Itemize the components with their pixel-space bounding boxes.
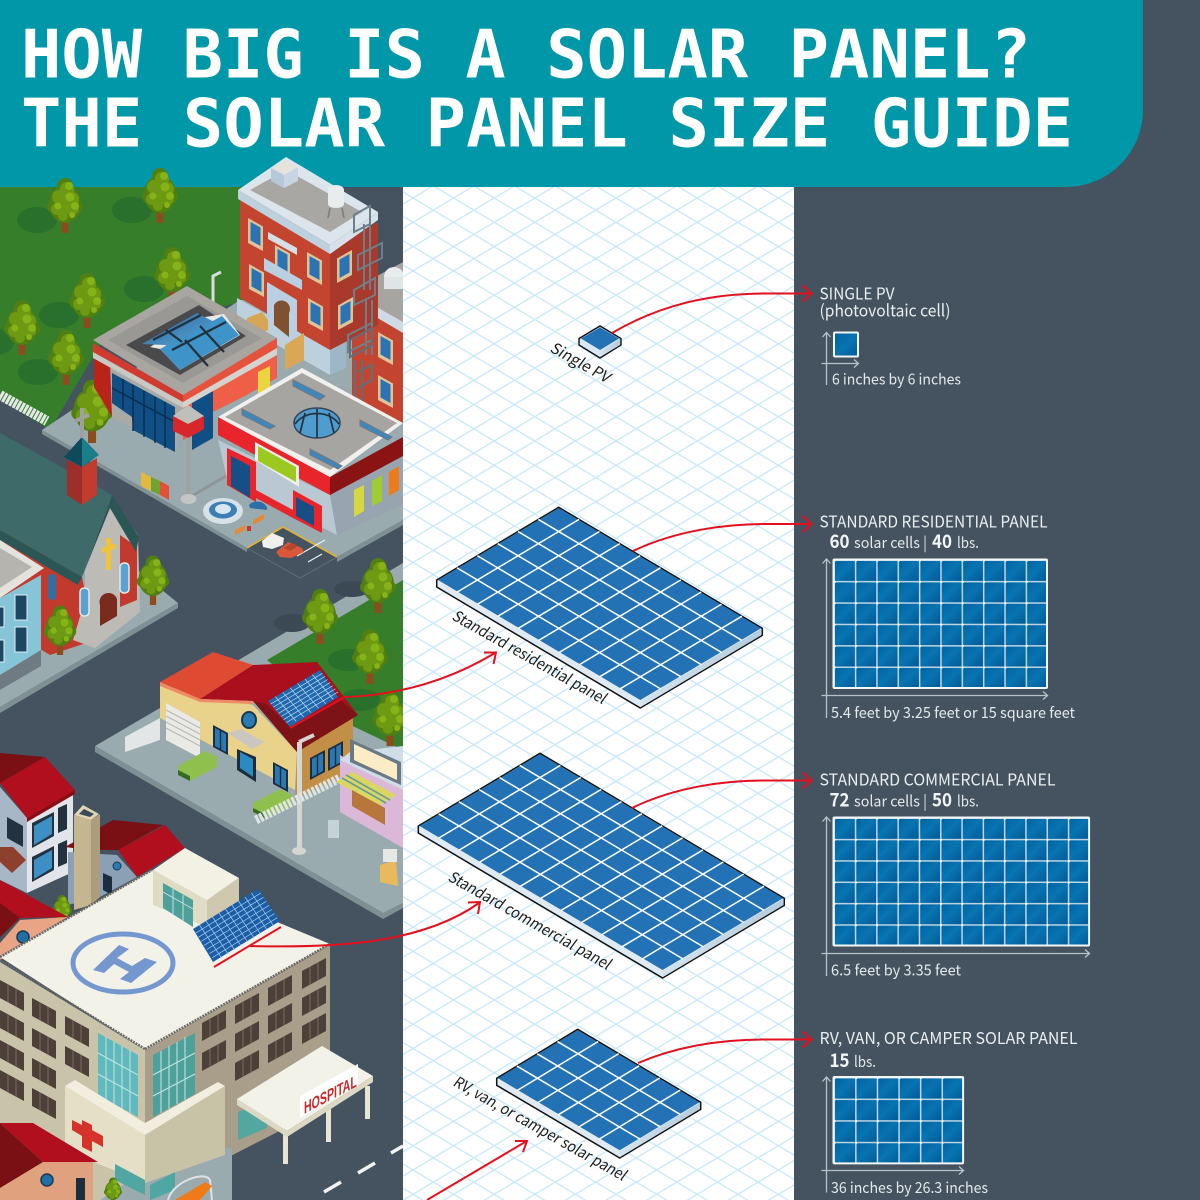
arrow: commercial to description <box>632 772 812 808</box>
stats: 50 <box>932 786 952 812</box>
windows <box>247 218 353 370</box>
dimension arrows <box>822 1077 964 1192</box>
description: standard residential panel <box>820 508 1075 723</box>
recycling bins <box>141 472 169 500</box>
trees near house <box>302 558 408 746</box>
stats <box>830 527 979 554</box>
road curb <box>42 430 247 552</box>
church block pavement <box>0 569 178 707</box>
panel drawing <box>834 818 1089 946</box>
hospital roof <box>0 870 330 1050</box>
small red-roof house bottom left <box>0 1123 122 1200</box>
pavement bottom of hospital <box>100 1148 232 1200</box>
house with rooftop solar panel <box>125 652 358 818</box>
panel drawing <box>834 560 1047 688</box>
chimney box <box>271 160 298 188</box>
title banner <box>0 0 1143 187</box>
store <box>218 368 403 535</box>
white house upper-left of hospital <box>0 753 75 893</box>
brick building rear right <box>352 262 404 424</box>
house block pavement <box>95 563 403 913</box>
heading: STANDARD RESIDENTIAL PANEL <box>820 508 1048 532</box>
road markings <box>324 1146 403 1192</box>
city illustration <box>0 157 408 1200</box>
stats <box>830 1046 876 1073</box>
fire station <box>71 286 277 453</box>
curtain wall glazing <box>98 1033 195 1117</box>
label: single PV: Single PV <box>546 337 617 387</box>
isometric panel: RV, van or camper <box>449 1029 701 1185</box>
isometric panel: standard residential <box>437 507 762 708</box>
hospital walls <box>0 944 330 1200</box>
gold cross <box>101 538 117 570</box>
kiosk <box>328 739 403 886</box>
hospital solar panel <box>193 889 280 962</box>
title line 2: THE SOLAR PANEL SIZE GUIDE <box>21 84 1073 162</box>
grass field upper left <box>0 187 245 430</box>
sub heading: (photovoltaic cell) <box>820 298 950 322</box>
entrance block <box>65 1080 225 1200</box>
brick building <box>237 157 382 375</box>
stats <box>830 786 979 812</box>
lawn behind house <box>267 580 403 750</box>
white fence <box>256 778 340 820</box>
stats: solar cells | <box>854 532 927 553</box>
trees around church <box>44 556 169 655</box>
arrow: to RV panel <box>427 1141 527 1200</box>
helipad <box>73 934 173 992</box>
stats: lbs. <box>854 1051 876 1072</box>
arrow: RV to description <box>638 1032 812 1063</box>
store doors <box>227 448 322 533</box>
isometric panel: single PV <box>546 326 621 387</box>
lamp post near house <box>292 735 314 855</box>
description: single PV <box>820 280 961 390</box>
title line 1: HOW BIG IS A SOLAR PANEL? <box>21 16 1031 94</box>
tan chimney <box>74 805 100 910</box>
pavement: fire station block <box>42 300 403 557</box>
stats: lbs. <box>957 790 979 812</box>
hospital <box>0 848 373 1200</box>
door and porch <box>228 729 264 749</box>
stats: solar cells | <box>854 790 927 812</box>
fire escape <box>348 206 382 355</box>
blue apartment bottom left <box>0 540 44 690</box>
stats: 15 <box>830 1046 850 1073</box>
rooftop panel <box>268 670 341 727</box>
size: 36 inches by 26.3 inches <box>831 1177 988 1198</box>
size: 5.4 feet by 3.25 feet or 15 square feet <box>831 702 1075 723</box>
dimension arrows <box>822 559 1048 718</box>
arrow: residential to description <box>633 516 812 551</box>
church door and windows <box>48 563 129 626</box>
hospital canopy with sign <box>237 1046 373 1164</box>
roof access box <box>153 848 239 927</box>
size: 6 inches by 6 inches <box>832 368 961 390</box>
hedges <box>178 751 217 781</box>
hospital windows <box>0 958 326 1119</box>
label: commercial: Standard commercial panel <box>444 866 617 974</box>
description: RV, van, or camper panel <box>820 1025 1078 1198</box>
arrow: single PV to description <box>612 286 812 333</box>
hospital canopy with sign: HOSPITAL <box>304 1071 357 1118</box>
water tank <box>328 185 344 218</box>
phone booth and benches <box>235 502 267 535</box>
arrow: hospital panel to commercial panel <box>214 902 480 967</box>
heading: RV, VAN, OR CAMPER SOLAR PANEL <box>820 1025 1078 1049</box>
label: RV: RV, van, or camper solar panel <box>449 1071 633 1185</box>
arrow: house panel to residential panel <box>290 652 496 728</box>
fountain <box>203 498 243 524</box>
heading: STANDARD COMMERCIAL PANEL <box>820 766 1056 790</box>
store sign <box>255 442 299 487</box>
blue-grey house with red roof <box>52 820 185 925</box>
store windows <box>354 466 399 517</box>
white picket fence <box>0 395 47 421</box>
round window <box>242 712 256 728</box>
orange sign bottom <box>168 1176 212 1200</box>
dome skylight <box>294 408 340 438</box>
stats: 72 <box>830 786 850 812</box>
heading: SINGLE PV <box>820 280 895 304</box>
stats: lbs. <box>957 532 979 553</box>
description: standard commercial panel <box>820 766 1090 980</box>
dimension arrows <box>822 332 858 385</box>
parking lot <box>247 527 337 578</box>
isometric panel: standard commercial <box>418 753 784 978</box>
trees in the field <box>4 168 190 385</box>
church <box>0 408 140 655</box>
church tower <box>64 408 99 505</box>
fire escape: rear building <box>350 328 372 410</box>
panel drawing <box>834 1077 963 1163</box>
panel: isometric grid sheet <box>403 187 794 1200</box>
roof vents <box>242 380 392 469</box>
stats: 40 <box>932 527 952 554</box>
skylight <box>126 305 246 375</box>
size: 6.5 feet by 3.35 feet <box>831 960 961 980</box>
dimension arrows <box>822 817 1090 976</box>
red lamp post <box>173 405 226 504</box>
stats: 60 <box>830 527 850 554</box>
lamp behind fire station <box>213 272 221 305</box>
label: residential: Standard residential panel <box>448 605 613 708</box>
swatch cell <box>834 332 858 356</box>
salmon house <box>0 880 68 960</box>
